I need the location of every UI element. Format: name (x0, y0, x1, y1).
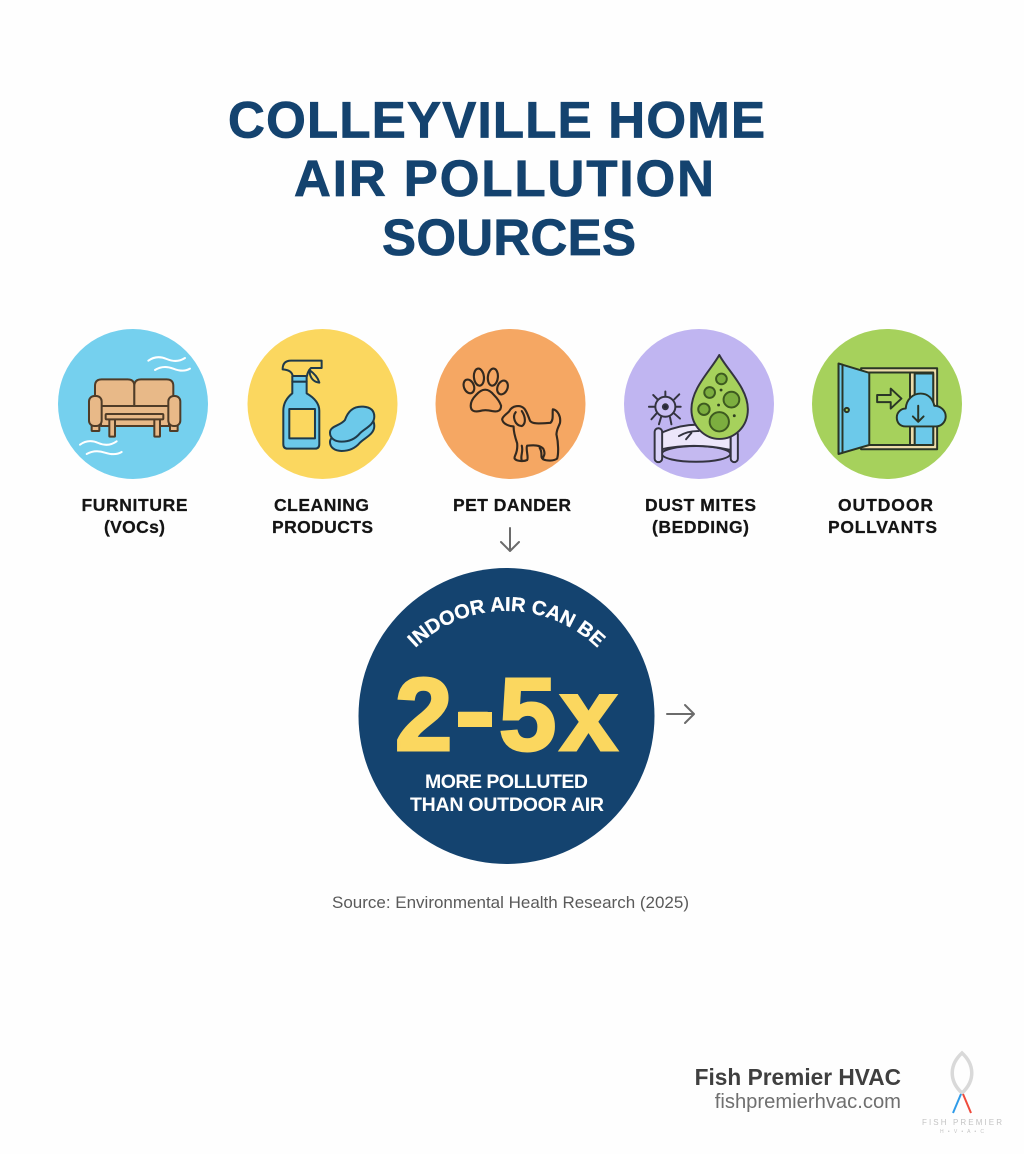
brand text: Fish Premier HVAC (695, 1064, 901, 1090)
callout: 2-5x statistic (358, 568, 654, 864)
brand text: fishpremierhvac.com (715, 1091, 901, 1113)
title (228, 92, 765, 266)
label: furniture (82, 495, 188, 537)
label: cleaning products: CLEANING (274, 495, 369, 515)
brand text (695, 1064, 901, 1113)
title: AIR POLLUTION (294, 150, 714, 207)
label: furniture: FURNITURE (82, 495, 188, 515)
icon: spray bottle and sponge (248, 329, 398, 479)
callout subtext (410, 771, 604, 816)
title: SOURCES (382, 209, 636, 266)
icon: paw print and dog (436, 329, 586, 479)
source note: Source: Environmental Health Research (2025) (332, 894, 689, 912)
label: furniture: (VOCs) (104, 517, 165, 537)
label: outdoor pollutants: POLLVANTS (828, 517, 937, 537)
icon: open door, window and cloud (812, 329, 962, 479)
panel: dust mites (624, 329, 774, 537)
label: dust mites: DUST MITES (645, 495, 756, 515)
label: cleaning products (272, 495, 373, 537)
panel: furniture VOCs (58, 329, 208, 537)
callout subtext: MORE POLLUTED (425, 771, 588, 793)
label: outdoor pollutants: OUTDOOR (838, 495, 933, 515)
callout subtext: THAN OUTDOOR AIR (410, 794, 604, 816)
curved heading: INDOOR AIR CAN BE (406, 597, 606, 648)
label: outdoor pollutants (828, 495, 937, 537)
label: cleaning products: PRODUCTS (272, 517, 373, 537)
logo: fish mark: FISH PREMIER (922, 1118, 1002, 1127)
logo: fish mark (922, 1053, 1002, 1135)
panel: pet dander (436, 329, 586, 515)
label: dust mites (645, 495, 756, 537)
label: dust mites: (BEDDING) (652, 517, 749, 537)
panel: outdoor pollutants (812, 329, 962, 537)
icon: dust mite, bedding and allergen drop (624, 329, 774, 479)
logo: fish mark: H • V • A • C (940, 1129, 984, 1135)
big number: 2-5x (395, 653, 617, 772)
label: pet dander: PET DANDER (453, 495, 571, 515)
icon: sofa with VOC wisps (58, 329, 208, 479)
arrow: right of callout (667, 705, 694, 723)
arrow: down to callout (501, 528, 519, 551)
panel: cleaning products (248, 329, 398, 537)
title: COLLEYVILLE HOME (228, 92, 765, 148)
